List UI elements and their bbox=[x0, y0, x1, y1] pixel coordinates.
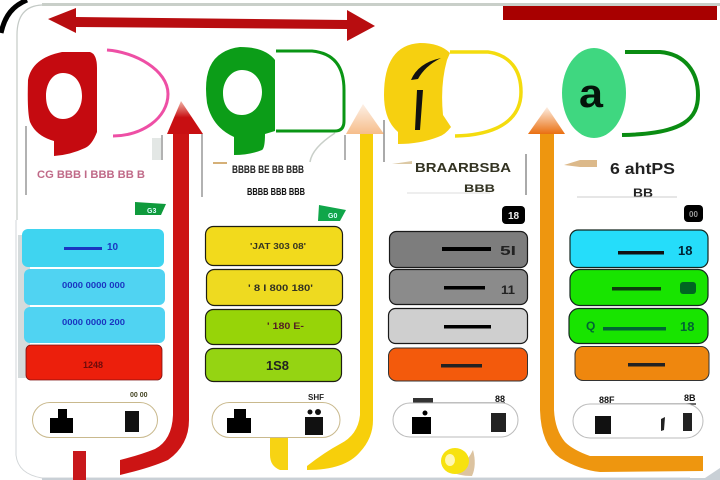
bar group bbox=[18, 229, 165, 380]
icon: yellow badge bbox=[384, 43, 451, 144]
panel: column 1 bbox=[18, 50, 202, 438]
icon: green badge bbox=[206, 47, 275, 155]
tag bbox=[502, 206, 525, 224]
panel: column 3 bbox=[384, 43, 528, 476]
pill with icons: 88F bbox=[599, 395, 615, 405]
tag bbox=[318, 205, 346, 221]
tag: G3 bbox=[147, 208, 156, 215]
pill with icons: SHF bbox=[308, 393, 324, 402]
bar group: 1S8 bbox=[266, 358, 289, 373]
outline: green rounded D bbox=[276, 51, 344, 131]
bar group: 0000 0000 000 bbox=[62, 280, 125, 290]
bar group: 11 bbox=[501, 283, 515, 297]
tag: G0 bbox=[328, 213, 337, 220]
heading box: BBBB BE BB BBB bbox=[232, 164, 304, 176]
bar group: 0000 0000 200 bbox=[62, 317, 125, 327]
heading box: CG BBB I BBB BB B bbox=[37, 169, 145, 181]
outline: yellow arc bbox=[450, 52, 521, 136]
heading box: 6 ahtPS bbox=[610, 161, 675, 178]
tag: 18 bbox=[508, 211, 519, 222]
bar group: ' 8 I 800 180' bbox=[248, 283, 313, 293]
arrow: red curved up bbox=[73, 101, 203, 480]
heading box bbox=[26, 126, 202, 197]
arrow: yellow curved up bbox=[270, 104, 384, 470]
tag bbox=[135, 202, 166, 215]
outline: pink arc bbox=[107, 50, 168, 136]
pill with icons bbox=[32, 392, 158, 438]
double-headed arrow bbox=[48, 8, 375, 41]
icon: green badge bbox=[562, 48, 626, 138]
tag: 00 bbox=[689, 210, 698, 219]
arrow: orange curved up bbox=[528, 107, 703, 472]
heading box: BRAARBSBA bbox=[415, 160, 512, 175]
pill with icons bbox=[573, 393, 703, 438]
bar group: 'JAT 303 08' bbox=[250, 242, 306, 251]
panel: column 4 bbox=[562, 48, 709, 438]
pill with icons: 8B bbox=[684, 393, 696, 403]
bar group: 5I bbox=[500, 243, 516, 258]
bar group bbox=[206, 226, 342, 382]
bar group: 1248 bbox=[83, 360, 103, 370]
heading box: BB bbox=[633, 186, 653, 200]
panel: column 2 bbox=[206, 47, 346, 438]
heading box: BBBB BBB BBB bbox=[247, 187, 305, 198]
bar group: Q bbox=[586, 319, 595, 333]
heading box bbox=[564, 160, 677, 200]
tag bbox=[684, 205, 703, 222]
bar group bbox=[388, 232, 528, 381]
icon glyph: black strokes bbox=[411, 58, 441, 130]
icon glyph: letter a: a bbox=[579, 72, 604, 116]
bar group bbox=[569, 230, 709, 380]
pill with icons bbox=[212, 393, 340, 438]
bar group: ' 180 E- bbox=[267, 321, 304, 331]
bar group: 10 bbox=[107, 242, 119, 253]
icon: yellow blob bbox=[441, 448, 475, 476]
outline: green arc bbox=[622, 52, 698, 135]
bar group: 18 bbox=[680, 319, 694, 334]
icon: red badge bbox=[28, 52, 97, 156]
pill with icons: 88 bbox=[495, 394, 505, 404]
heading box bbox=[384, 120, 526, 195]
heading box: BBB bbox=[464, 183, 495, 195]
pill with icons bbox=[393, 394, 518, 437]
pill with icons: 00 00 bbox=[130, 392, 148, 399]
top-right red bar bbox=[503, 6, 717, 20]
heading box bbox=[213, 133, 345, 198]
bar group: 18 bbox=[678, 243, 692, 258]
